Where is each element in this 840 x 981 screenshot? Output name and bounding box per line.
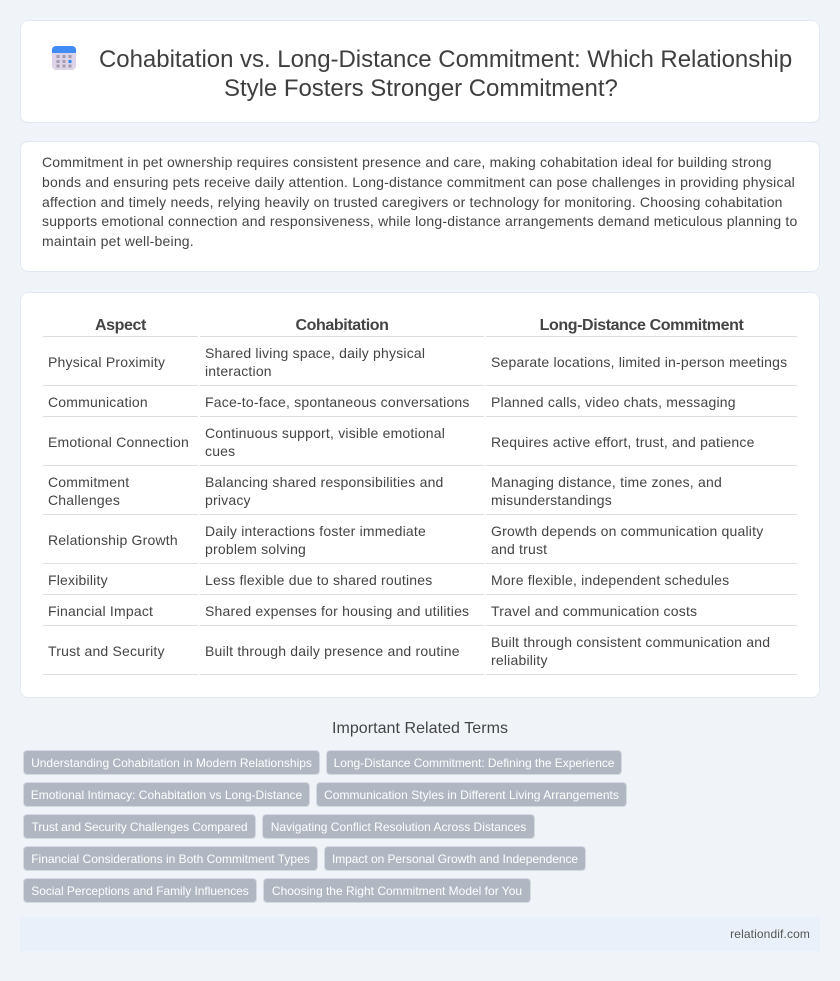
column heading: Cohabitation: Cohabitation: [296, 317, 388, 334]
tag: [316, 782, 627, 807]
row: Trust and Security: Trust and Security: [48, 643, 165, 659]
title: Cohabitation vs. Long-Distance Commitment: Which Relationship: [99, 46, 792, 73]
cell: [205, 523, 426, 557]
footer text: relationdif.com: [730, 927, 810, 941]
cell: Shared expenses for housing and utilities: [205, 603, 469, 619]
cell: Managing distance, time zones, and: [491, 474, 722, 490]
cell: Travel and communication costs: [491, 603, 697, 619]
tag: Financial Considerations in Both Commitment Types: [31, 852, 310, 866]
cell: Shared living space, daily physical: [205, 345, 425, 361]
column heading: Aspect: Aspect: [95, 317, 146, 334]
tag: Navigating Conflict Resolution Across Distances: [271, 820, 526, 834]
cell: interaction: [205, 363, 272, 379]
intro text: supports emotional connection and responsiveness, while long-distance arrangements demand meticulous planning to: [42, 213, 798, 229]
cell: privacy: [205, 492, 251, 508]
tag: [324, 846, 586, 871]
tag: [23, 846, 318, 871]
cell: Balancing shared responsibilities and: [205, 474, 444, 490]
cell: misunderstandings: [491, 492, 612, 508]
row: Commitment Challenges: [48, 474, 130, 508]
cell: Planned calls, video chats, messaging: [491, 394, 736, 410]
cell: [205, 474, 444, 508]
tag: [23, 750, 320, 775]
cell: Built through consistent communication and: [491, 634, 770, 650]
intro text: bonds and ensuring pets receive daily attention. Long-distance commitment can pose challenges in providing physical: [42, 174, 795, 190]
intro text: maintain pet well-being.: [42, 233, 194, 249]
row: Flexibility: Flexibility: [48, 572, 108, 588]
tag: [23, 878, 257, 903]
comparison table panel: [20, 292, 820, 698]
cell: [491, 634, 770, 668]
tag: [263, 878, 531, 903]
cell: Separate locations, limited in-person meetings: [491, 354, 787, 370]
footer bar: [20, 917, 820, 951]
tag: Long-Distance Commitment: Defining the Experience: [334, 756, 614, 770]
row: Financial Impact: Financial Impact: [48, 603, 153, 619]
tag: Social Perceptions and Family Influences: [31, 884, 249, 898]
tag: Emotional Intimacy: Cohabitation vs Long-Distance: [31, 788, 302, 802]
intro text: [42, 154, 798, 249]
row: Communication: Communication: [48, 394, 148, 410]
icon: calendar: [52, 46, 76, 70]
cell: [491, 523, 764, 557]
title: Style Fosters Stronger Commitment?: [224, 75, 618, 102]
tag: Impact on Personal Growth and Independence: [332, 852, 578, 866]
cell: More flexible, independent schedules: [491, 572, 729, 588]
cell: reliability: [491, 652, 548, 668]
cell: Growth depends on communication quality: [491, 523, 763, 539]
cell: Face-to-face, spontaneous conversations: [205, 394, 470, 410]
tag: Understanding Cohabitation in Modern Relationships: [31, 756, 312, 770]
cell: [205, 425, 445, 459]
cell: Requires active effort, trust, and patience: [491, 434, 755, 450]
title: [99, 46, 792, 102]
tag: [23, 814, 256, 839]
tag: [326, 750, 622, 775]
intro card: [20, 141, 820, 272]
intro text: affection and timely needs, relying heavily on trusted caregivers or technology for monitoring. Choosing cohabitation: [42, 194, 783, 210]
row: Relationship Growth: Relationship Growth: [48, 532, 178, 548]
cell: [491, 474, 722, 508]
tag: Communication Styles in Different Living Arrangements: [324, 788, 619, 802]
cell: Less flexible due to shared routines: [205, 572, 432, 588]
row: Commitment Challenges: Challenges: [48, 492, 120, 508]
row: Commitment Challenges: Commitment: [48, 474, 129, 490]
tag: [23, 782, 310, 807]
cell: problem solving: [205, 541, 306, 557]
cell: Built through daily presence and routine: [205, 643, 460, 659]
header card: [20, 20, 820, 123]
cell: Continuous support, visible emotional: [205, 425, 445, 441]
cell: Daily interactions foster immediate: [205, 523, 426, 539]
cell: [205, 345, 425, 379]
cell: and trust: [491, 541, 547, 557]
row: Physical Proximity: Physical Proximity: [48, 354, 165, 370]
related terms heading: Important Related Terms: [332, 720, 508, 737]
intro text: Commitment in pet ownership requires consistent presence and care, making cohabitation ideal for building strong: [42, 154, 772, 170]
tag: [262, 814, 535, 839]
row: Emotional Connection: Emotional Connection: [48, 434, 189, 450]
tag: Trust and Security Challenges Compared: [32, 820, 247, 834]
tag: Choosing the Right Commitment Model for You: [272, 884, 522, 898]
column heading: Long-Distance Commitment: Long-Distance Commitment: [540, 317, 743, 334]
cell: cues: [205, 443, 235, 459]
